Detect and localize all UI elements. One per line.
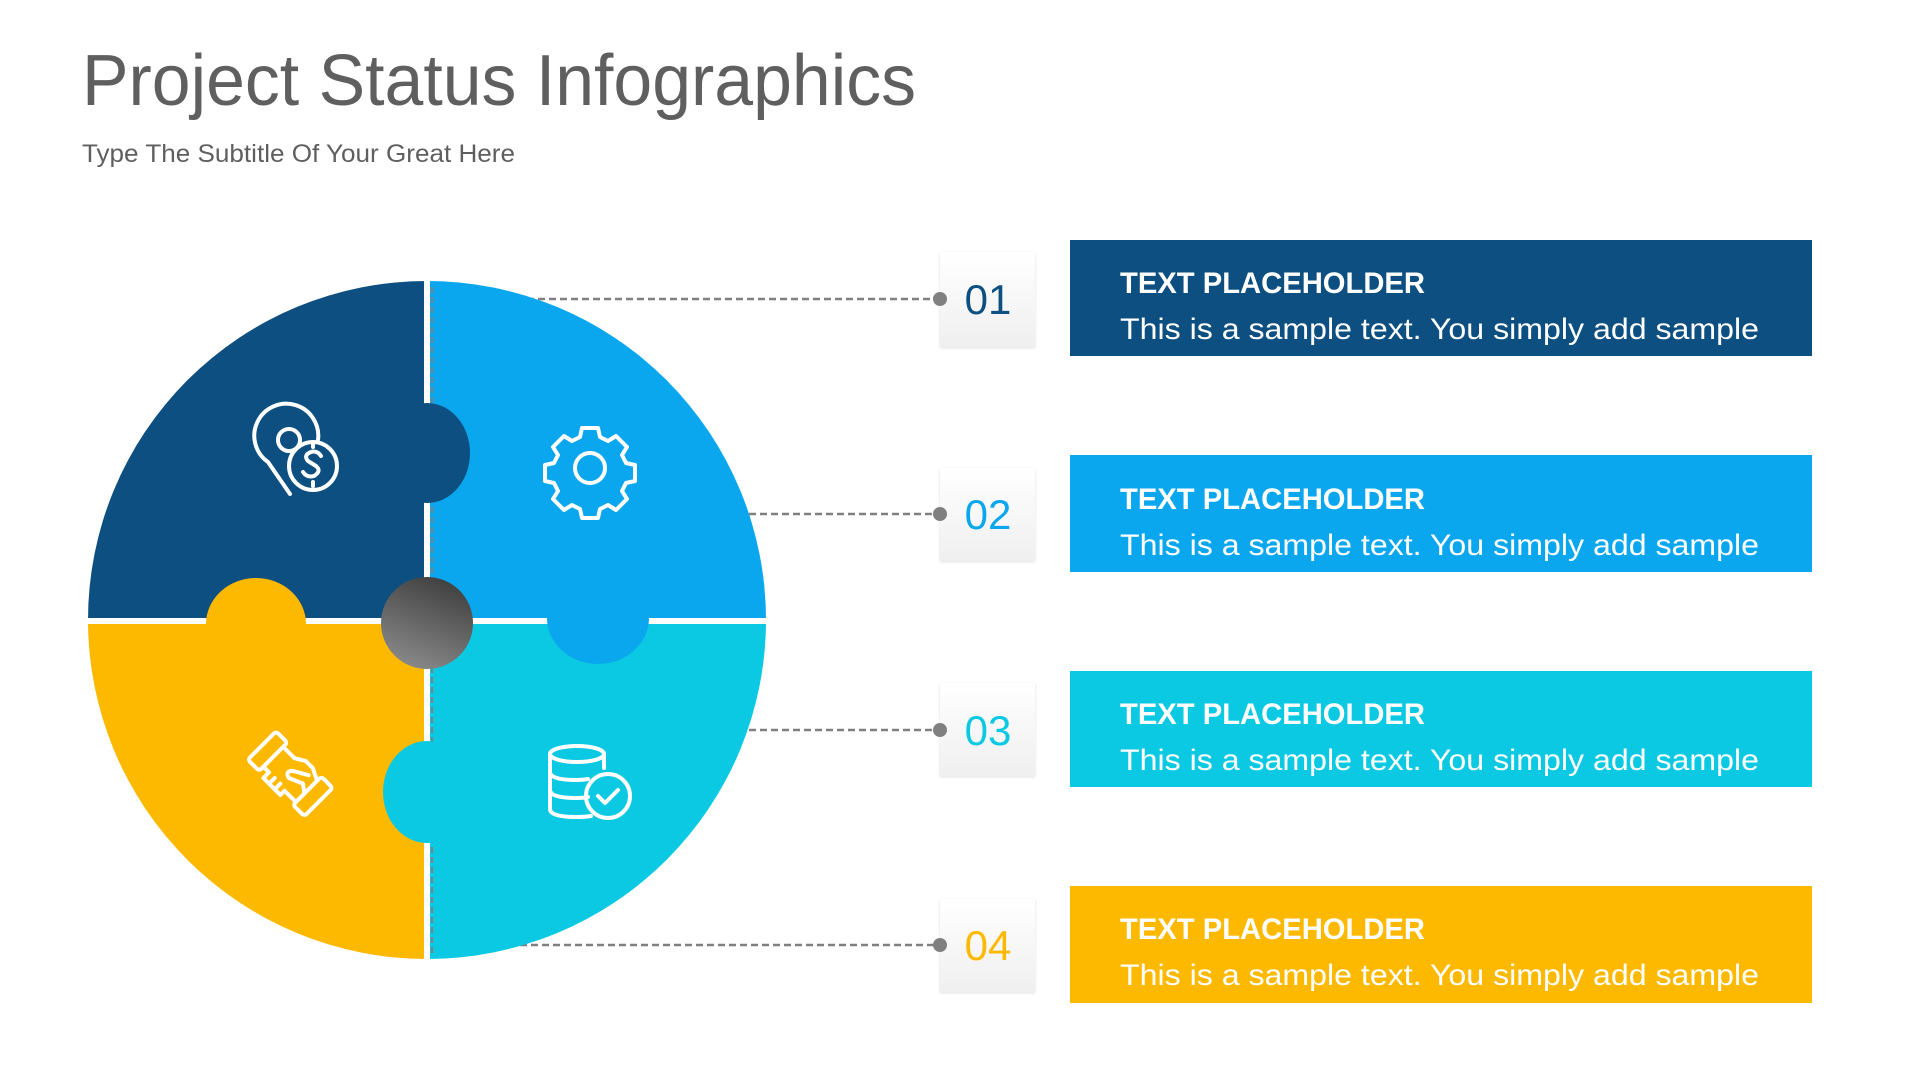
center circle bbox=[381, 577, 473, 669]
puzzle circle bbox=[80, 273, 775, 968]
bar 03: TEXT PLACEHOLDER bbox=[1120, 698, 1425, 731]
number box 04: 04 bbox=[965, 922, 1011, 969]
piece 4: yellow bbox=[88, 620, 427, 959]
piece 1: dark blue bbox=[88, 281, 427, 620]
icon: handshake bbox=[246, 731, 333, 818]
bar 04: This is a sample text. You simply add sample bbox=[1120, 959, 1759, 992]
icon: database check bbox=[550, 746, 630, 818]
bar 04: TEXT PLACEHOLDER bbox=[1120, 913, 1425, 946]
bar 03 bbox=[1070, 671, 1812, 787]
bar 01: TEXT PLACEHOLDER bbox=[1120, 267, 1425, 300]
number box 03 bbox=[940, 683, 1035, 776]
title: Project Status Infographics bbox=[82, 41, 916, 121]
bar 02: TEXT PLACEHOLDER bbox=[1120, 483, 1425, 516]
subtitle: Type The Subtitle Of Your Great Here bbox=[82, 140, 515, 168]
number box 04 bbox=[940, 899, 1035, 992]
icon: location dollar bbox=[254, 404, 337, 494]
bar 02 bbox=[1070, 455, 1812, 572]
item 03 bbox=[933, 671, 1812, 787]
number box 02 bbox=[940, 468, 1035, 561]
bar 03: This is a sample text. You simply add sample bbox=[1120, 744, 1759, 777]
number box 01 bbox=[940, 252, 1035, 347]
item 04 bbox=[933, 886, 1812, 1003]
number box 03: 03 bbox=[965, 707, 1011, 754]
icon: gear bbox=[545, 428, 635, 518]
bar 02: This is a sample text. You simply add sample bbox=[1120, 529, 1759, 562]
bar 04 bbox=[1070, 886, 1812, 1003]
bar 01 bbox=[1070, 240, 1812, 356]
number box 02: 02 bbox=[965, 491, 1011, 538]
number box 01: 01 bbox=[965, 276, 1011, 323]
item 01 bbox=[933, 240, 1812, 356]
dashed connector lines bbox=[520, 299, 940, 945]
piece 2: light blue bbox=[427, 281, 766, 620]
piece 3: cyan bbox=[427, 620, 766, 959]
tabs bbox=[384, 403, 470, 503]
item 02 bbox=[933, 455, 1812, 572]
bar 01: This is a sample text. You simply add sample bbox=[1120, 313, 1759, 346]
